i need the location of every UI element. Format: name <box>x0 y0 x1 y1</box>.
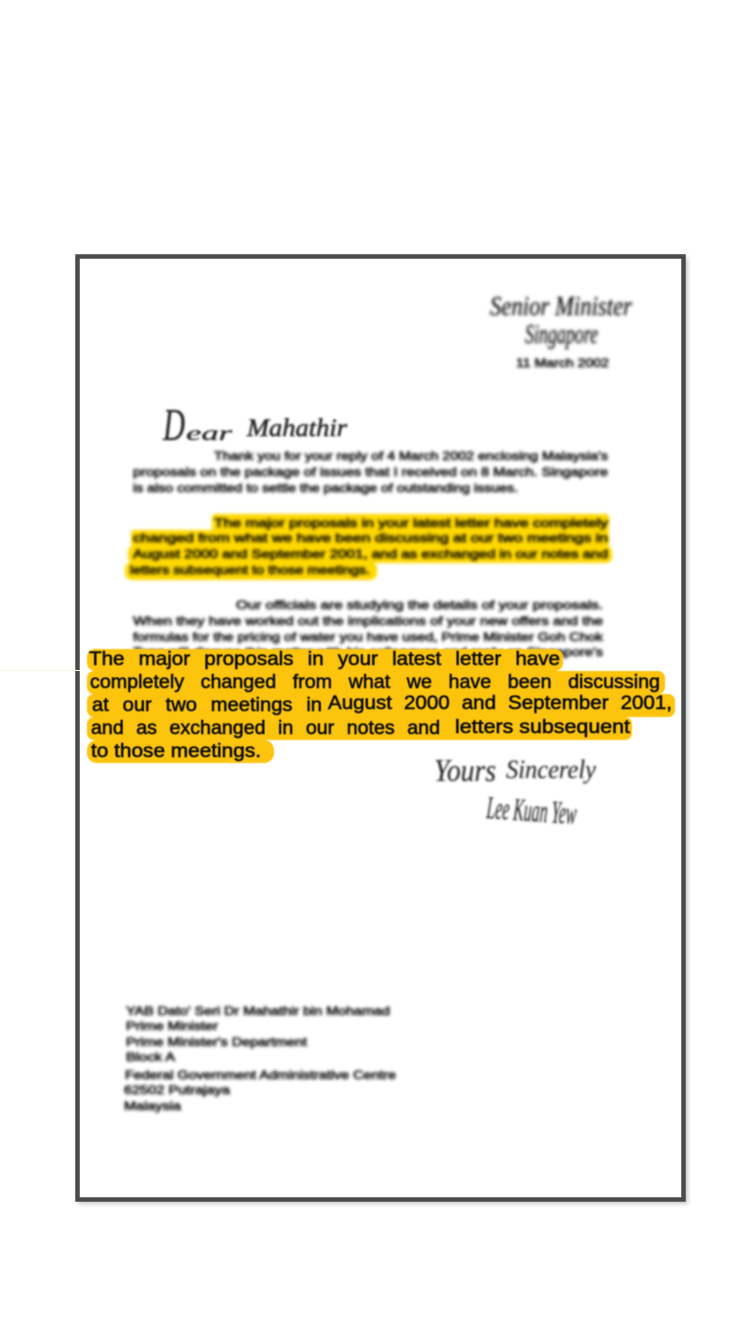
opening paragraph: proposals on the package of issues that I received on 8 March. Singapore <box>133 465 608 479</box>
handwritten salutation: D <box>162 399 185 450</box>
third paragraph: formulas for the pricing of water you have used, Prime Minister Goh Chok <box>133 630 604 644</box>
enlarged highlighted quote <box>0 648 675 763</box>
recipient address block: Prime Minister's Department <box>126 1035 308 1049</box>
letterhead: sender and date: 11 March 2002 <box>516 356 609 370</box>
recipient address block <box>124 1004 396 1113</box>
recipient address block: 62502 Putrajaya <box>124 1083 230 1097</box>
opening paragraph: Thank you for your reply of 4 March 2002 enclosing Malaysia's <box>214 449 608 463</box>
quote text: at our two meetings in <box>92 694 322 716</box>
letter page frame <box>78 256 688 1204</box>
quote text: and as exchanged in our notes and <box>91 717 440 739</box>
handwritten sign-off: Lee Kuan Yew <box>485 789 578 831</box>
highlighted paragraph in letter: August 2000 and September 2001, and as exchanged in our notes and <box>133 547 608 561</box>
highlighted paragraph in letter: The major proposals in your latest letter have completely <box>214 516 608 530</box>
opening paragraph <box>133 449 608 495</box>
recipient address block: YAB Dato' Seri Dr Mahathir bin Mohamad <box>126 1004 390 1018</box>
quote text: August 2000 and September 2001, <box>328 692 672 714</box>
opening paragraph: is also committed to settle the package of outstanding issues. <box>133 481 518 495</box>
handwritten salutation: Mahathir <box>246 415 347 442</box>
quote text: completely changed from what we have been discussing <box>90 671 660 693</box>
highlighted paragraph in letter: letters subsequent to those meetings. <box>130 563 370 577</box>
recipient address block: Block A <box>126 1050 175 1064</box>
highlighted paragraph in letter: changed from what we have been discussing at our two meetings in <box>133 531 608 545</box>
letterhead: sender and date: Singapore <box>525 319 598 349</box>
letterhead: sender and date: Senior Minister <box>490 291 632 321</box>
third paragraph: Tong will discuss this matter with his colleagues and reply on Singapore's <box>133 645 603 659</box>
quote text: letters subsequent <box>455 716 631 738</box>
handwritten salutation: ear <box>186 421 233 445</box>
third paragraph: Our officials are studying the details of your proposals. <box>236 598 603 612</box>
recipient address block: Federal Government Administrative Centre <box>125 1068 396 1082</box>
highlighted paragraph in letter <box>125 514 612 580</box>
quote text <box>89 648 672 762</box>
recipient address block: Malaysia <box>124 1099 181 1113</box>
handwritten sign-off <box>434 752 596 831</box>
third paragraph <box>133 598 604 659</box>
letterhead: sender and date <box>490 291 632 370</box>
recipient address block: Prime Minister <box>126 1019 218 1033</box>
third paragraph: When they have worked out the implications of your new offers and the <box>133 614 603 628</box>
handwritten sign-off: Yours <box>434 752 496 788</box>
quote highlight bars <box>87 649 675 763</box>
handwritten salutation <box>162 399 347 450</box>
quote text: The major proposals in your latest letter have <box>89 648 560 670</box>
quote text: to those meetings. <box>91 740 261 762</box>
handwritten sign-off: Sincerely <box>506 755 596 784</box>
